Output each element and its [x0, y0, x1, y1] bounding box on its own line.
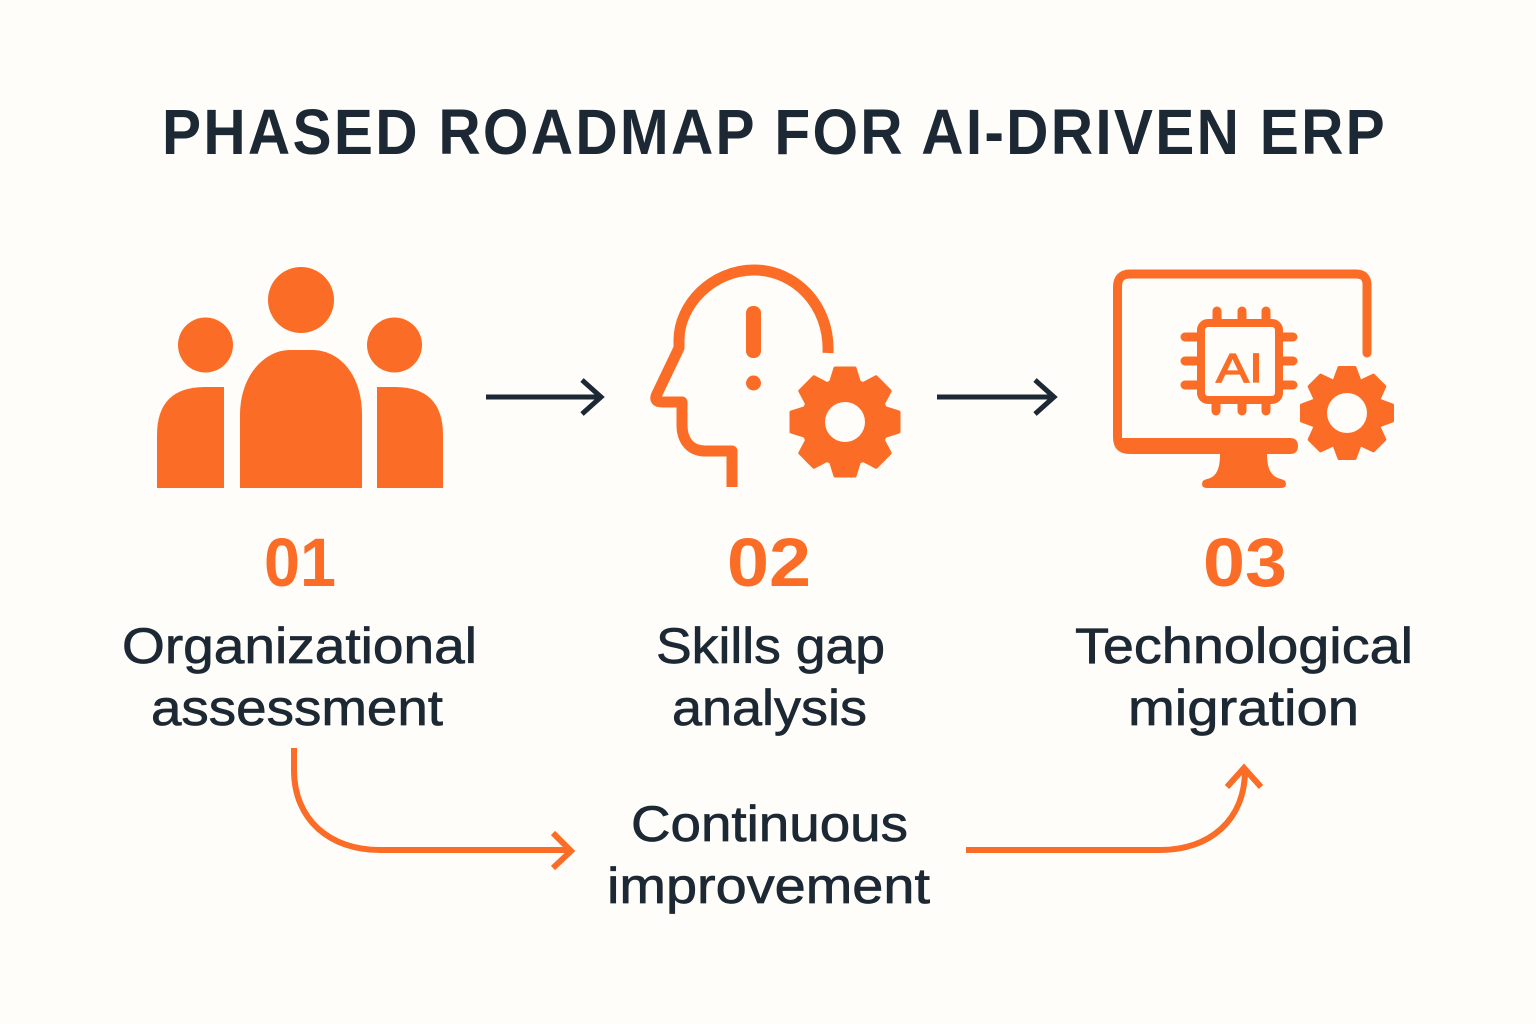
icon: people group	[157, 267, 443, 488]
arrow: step 1 to step 2	[486, 380, 601, 414]
step 01 label: assessment	[151, 680, 443, 736]
title: PHASED ROADMAP FOR AI-DRIVEN ERP	[162, 96, 1387, 168]
step 02 label: analysis	[672, 680, 867, 736]
step 03 label: migration	[1128, 680, 1359, 736]
step 02 label	[656, 618, 885, 736]
step 02 number: 02	[727, 524, 811, 601]
arrow: step 2 to step 3	[937, 380, 1054, 414]
step 01 number: 01	[264, 524, 336, 601]
curved arrow: continuous improvement to migration	[966, 768, 1261, 850]
step 02 label: Skills gap	[656, 618, 885, 674]
step 01 label	[122, 618, 477, 736]
continuous improvement label: improvement	[607, 858, 930, 914]
step 03 label	[1075, 618, 1413, 736]
step 03 number: 03	[1203, 524, 1287, 601]
continuous improvement label	[607, 796, 930, 914]
step 03 label: Technological	[1075, 618, 1413, 674]
icon: monitor with AI chip and gear: AI	[1216, 345, 1263, 391]
continuous improvement label: Continuous	[631, 796, 908, 852]
icon: head with alert and gear	[656, 270, 899, 487]
step 01 label: Organizational	[122, 618, 477, 674]
curved arrow: assessment to continuous improvement	[294, 748, 571, 868]
icon: monitor with AI chip and gear	[1113, 274, 1392, 488]
